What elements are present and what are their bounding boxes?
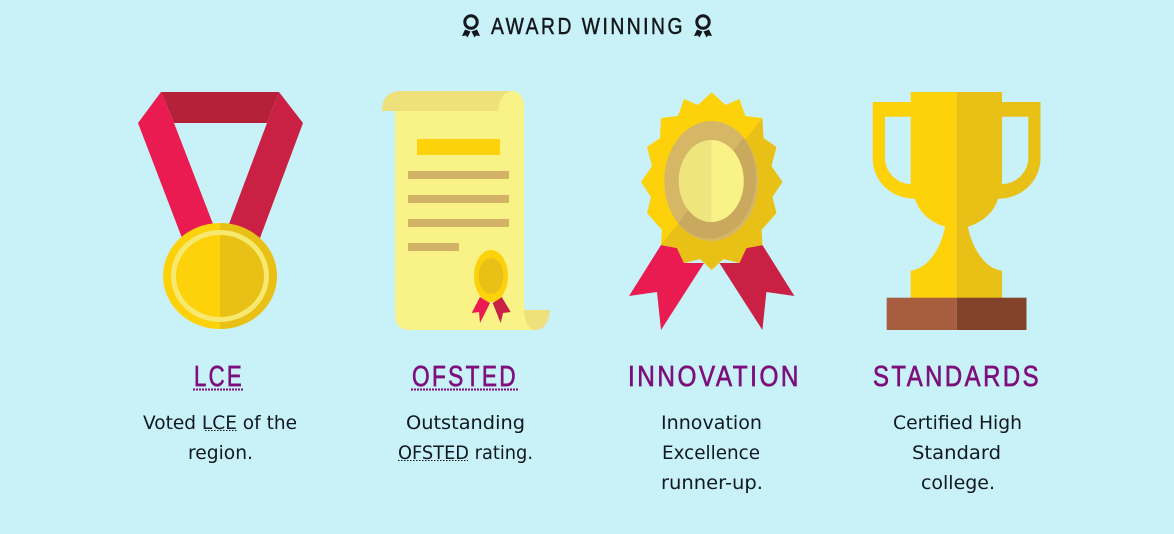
text: Innovation description: Excellence [662,442,760,464]
icon: trophy [873,92,1040,330]
heading: LCE: LCE [194,361,244,393]
text: Standards description [893,412,1022,494]
column: Innovation [628,361,801,494]
icon: medal [138,92,303,329]
heading text: AWARD WINNING [491,13,685,39]
column: OFSTED [398,361,533,464]
text: OFSTED description [398,412,533,464]
text: Innovation description: runner-up. [661,472,763,494]
icon: right rosette [694,16,712,38]
text: Innovation description [661,412,763,494]
icon: left rosette [462,16,480,38]
column: LCE [143,361,297,464]
text: OFSTED description: Outstanding [406,412,525,434]
heading: INNOVATION: INNOVATION [628,361,801,393]
icon: certificate scroll [382,91,550,330]
column: Standards [873,361,1041,494]
title: award winning [462,13,712,39]
text: Standards description: college. [921,472,995,494]
text: LCE description [143,412,297,464]
heading: STANDARDS: STANDARDS [873,361,1041,393]
text: Standards description: Certified High [893,412,1022,434]
icon: rosette [629,92,794,330]
text: Innovation description: Innovation [661,412,762,434]
heading: OFSTED: OFSTED [412,361,518,393]
text: LCE description: region. [188,442,253,464]
text: Standards description: Standard [912,442,1001,464]
text: OFSTED description: OFSTED rating. [398,442,533,464]
text: LCE description: Voted LCE of the [143,412,297,434]
